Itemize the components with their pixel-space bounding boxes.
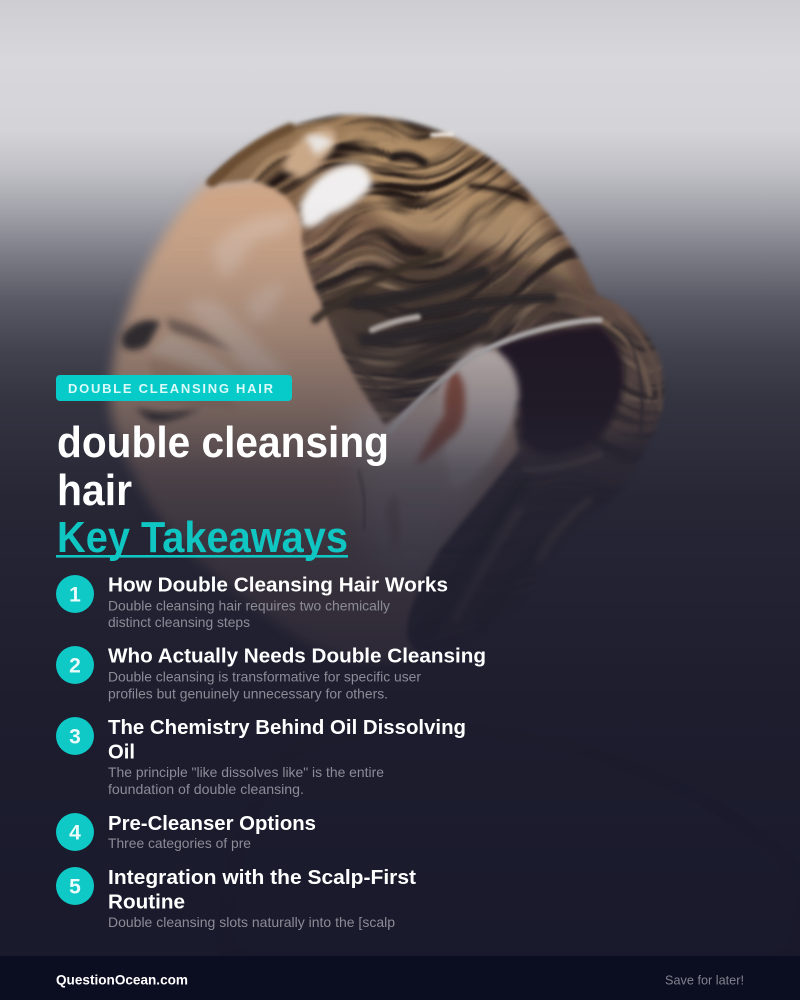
- takeaway 5: Integration with the Scalp-First: [108, 866, 416, 889]
- takeaway 2: 2: [69, 654, 81, 678]
- takeaway 2: Double cleansing is transformative for specific user: [108, 670, 421, 684]
- takeaway 3: The Chemistry Behind Oil Dissolving: [108, 716, 466, 739]
- takeaway 5: 5: [69, 876, 81, 898]
- ear: [358, 342, 524, 524]
- hair streak texture: [206, 112, 665, 448]
- takeaway 3: 3: [69, 726, 81, 748]
- face and neck skin: [110, 170, 521, 660]
- category badge: DOUBLE CLEANSING HAIR: [68, 381, 274, 396]
- takeaway 1: How Double Cleansing Hair Works: [108, 574, 448, 596]
- foam highlights in hair: [372, 134, 452, 330]
- mid hair shadow: [300, 256, 590, 420]
- nape darkening: [506, 438, 648, 486]
- light hair sheen: [340, 130, 575, 285]
- title: double cleansing: [57, 418, 389, 467]
- shampoo foam on crown: [282, 128, 372, 227]
- takeaway 5: [56, 866, 416, 930]
- nape hair strands: [506, 500, 590, 532]
- takeaway 5: Routine: [108, 890, 185, 914]
- takeaway 5: Double cleansing slots naturally into the [scalp: [108, 915, 395, 930]
- takeaway 2: Who Actually Needs Double Cleansing: [108, 644, 486, 668]
- hair mass with soft edge: [204, 111, 664, 650]
- foam on forehead: [185, 214, 300, 375]
- takeaway 4: Three categories of pre: [108, 836, 251, 851]
- title: hair: [57, 466, 132, 515]
- shoulders: [220, 735, 800, 960]
- footer bar: QuestionOcean.com: [56, 972, 188, 988]
- title: [57, 418, 389, 515]
- takeaway 3: foundation of double cleansing.: [108, 782, 304, 797]
- footer bar: Save for later!: [665, 972, 744, 988]
- takeaway 2: profiles but genuinely unnecessary for others.: [108, 686, 388, 702]
- category badge: [56, 375, 292, 401]
- takeaway 3: Oil: [108, 740, 135, 764]
- subtitle: key takeaways: Key Takeaways: [57, 513, 348, 562]
- dark hair bun: [495, 325, 624, 456]
- bun outer strands: [590, 318, 663, 458]
- takeaway 3: The principle "like dissolves like" is the entire: [108, 765, 384, 780]
- foam band above ear: [390, 320, 600, 432]
- takeaway 1: Double cleansing hair requires two chemically: [108, 598, 390, 614]
- takeaway 2: [56, 644, 486, 702]
- dark hair strands: [212, 128, 552, 410]
- photo: woman washing hair: [104, 111, 664, 658]
- hair base colour: [206, 112, 664, 519]
- takeaway 4: [56, 812, 316, 851]
- takeaway 1: [56, 574, 448, 630]
- takeaways list: [56, 574, 486, 930]
- takeaway 4: Pre-Cleanser Options: [108, 812, 316, 835]
- takeaway 4: 4: [69, 822, 81, 844]
- pale neck skin below ear: [350, 390, 475, 536]
- footer bar: [0, 956, 800, 1000]
- takeaway 1: 1: [69, 584, 81, 606]
- takeaway 3: [56, 716, 466, 797]
- takeaway 1: distinct cleansing steps: [108, 615, 250, 630]
- eye and brow shading: [122, 318, 250, 421]
